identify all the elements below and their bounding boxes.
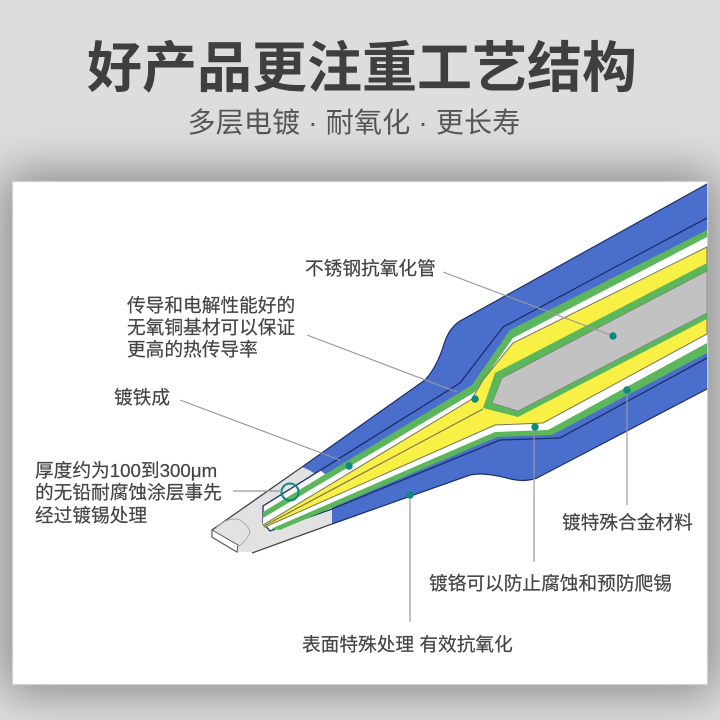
gray tip [212, 467, 332, 552]
label: chrome plating: 镀铬可以防止腐蚀和预防爬锡 [429, 573, 672, 594]
tip outline [212, 467, 332, 553]
subtitle: 多层电镀 · 耐氧化 · 更长寿 [188, 107, 520, 138]
title: 好产品更注重工艺结构 [87, 37, 637, 99]
label: oxygen-free copper: 无氧铜基材可以保证 [127, 317, 295, 338]
tip end face [212, 519, 250, 552]
white layer [263, 237, 707, 528]
label: special alloy: 镀特殊合金材料 [562, 512, 693, 533]
blue outer plating [302, 184, 707, 524]
center line in yellow [264, 409, 483, 526]
inner dark contour [263, 218, 707, 531]
teal dots [345, 332, 631, 499]
label: surface treatment: 表面特殊处理 有效抗氧化 [302, 634, 513, 655]
stainless steel core [492, 271, 707, 411]
label: iron plating: 镀铁成 [114, 387, 170, 408]
blue outline [302, 184, 707, 524]
label: oxygen-free copper [127, 295, 295, 360]
white interior at tip [263, 470, 332, 531]
label: lead-free coating: 经过镀锡处理 [35, 505, 147, 526]
label: lead-free coating [35, 460, 222, 526]
green layer [263, 230, 707, 530]
leader lines [180, 272, 627, 622]
circle marker [282, 484, 298, 500]
inner green tube [483, 263, 707, 417]
label: oxygen-free copper: 传导和电解性能好的 [127, 295, 295, 316]
panel: white diagram card [13, 182, 707, 684]
label: stainless tube: 不锈钢抗氧化管 [305, 258, 436, 279]
label: oxygen-free copper: 更高的热传导率 [127, 339, 258, 360]
label: lead-free coating: 的无铅耐腐蚀涂层事先 [35, 482, 222, 503]
label: lead-free coating: 厚度约为100到300μm [35, 460, 217, 481]
yellow layer [263, 247, 707, 527]
